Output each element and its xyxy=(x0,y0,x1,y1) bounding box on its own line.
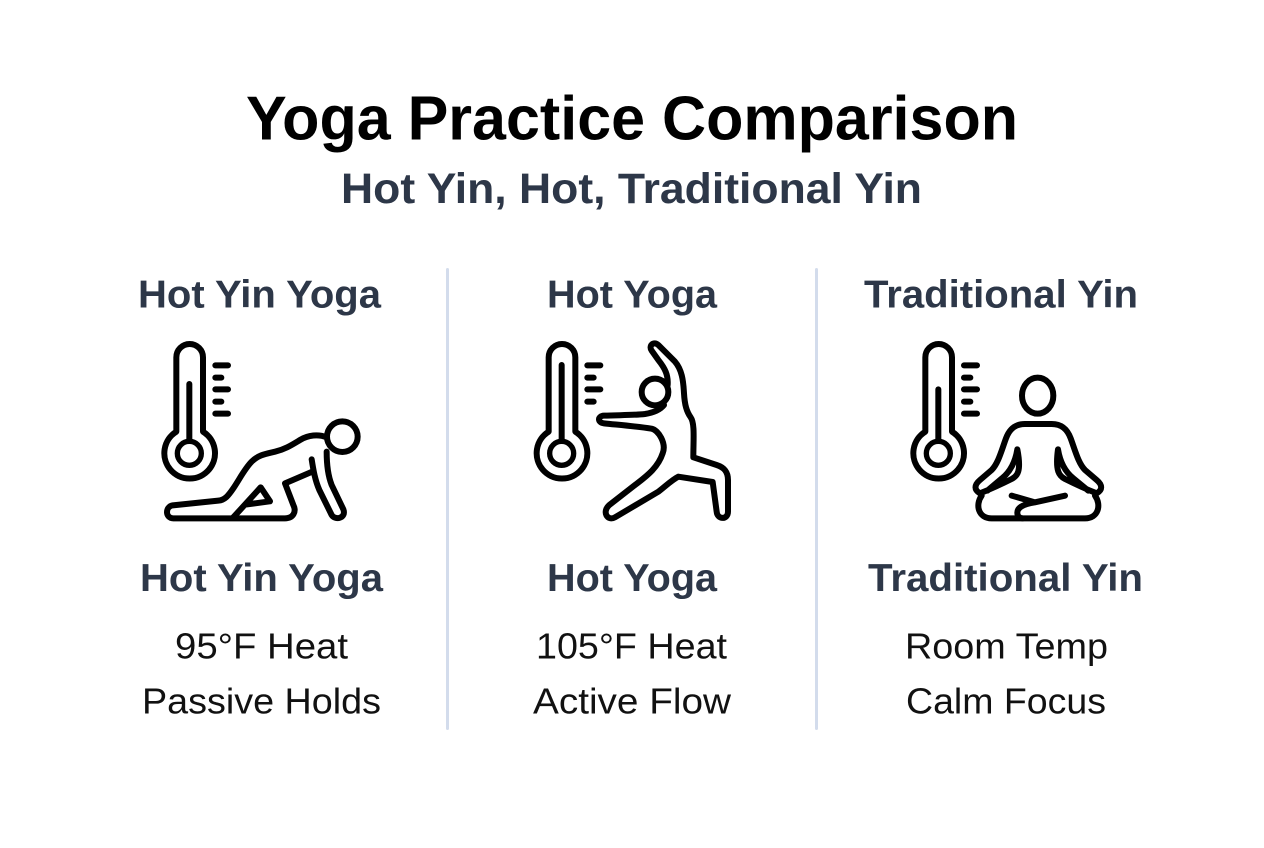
icon: thermometer and warrior figure xyxy=(537,343,728,518)
icon: thermometer and meditating figure xyxy=(913,344,1101,518)
subtitle: Hot Yin, Hot, Traditional Yin xyxy=(341,165,922,213)
panel: hot yoga xyxy=(533,274,732,722)
heading: hot yoga: Hot Yoga xyxy=(547,274,717,316)
text: room temp: Room Temp xyxy=(905,626,1108,666)
text: 105F heat: 105°F Heat xyxy=(536,626,727,666)
label: hot yoga: Hot Yoga xyxy=(547,557,717,600)
column divider left xyxy=(446,268,449,730)
text: passive holds: Passive Holds xyxy=(142,680,381,722)
text: 95F heat: 95°F Heat xyxy=(175,626,348,666)
text: calm focus: Calm Focus xyxy=(906,680,1106,722)
panel: traditional yin xyxy=(864,274,1143,722)
panel: hot yin yoga xyxy=(138,274,383,722)
column divider right xyxy=(815,268,818,730)
label: hot yin yoga: Hot Yin Yoga xyxy=(140,557,383,600)
label: traditional yin: Traditional Yin xyxy=(868,557,1143,600)
heading: traditional yin: Traditional Yin xyxy=(864,274,1138,316)
text: active flow: Active Flow xyxy=(533,680,732,722)
title: Yoga Practice Comparison xyxy=(246,84,1018,154)
icon: thermometer and kneeling figure xyxy=(164,344,358,518)
heading: hot yin yoga: Hot Yin Yoga xyxy=(138,274,381,316)
